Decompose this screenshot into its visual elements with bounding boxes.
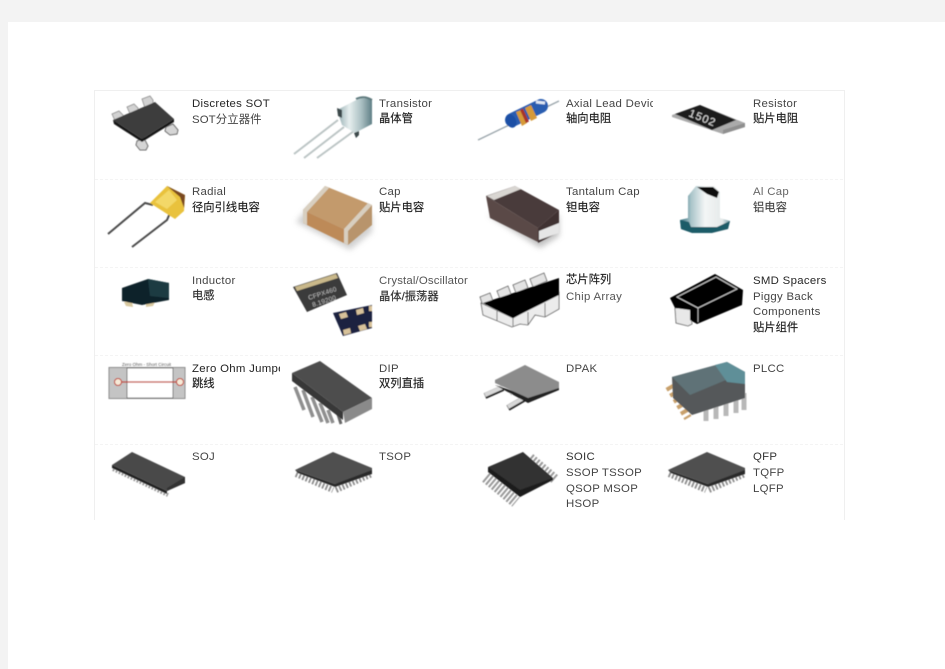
label: SMD Spacers: Components (753, 306, 821, 318)
label: Resistor: 贴片电阻 (753, 111, 798, 125)
label: Inductor: 电感 (192, 288, 215, 302)
cell: QFP (668, 451, 785, 495)
label: Resistor (753, 98, 798, 125)
row 4 (109, 361, 785, 424)
row 1 (112, 96, 798, 158)
icon: DPAK package (485, 365, 559, 408)
label: Axial Lead Device (566, 99, 653, 124)
cell: Transistor (294, 97, 432, 158)
row 2 (108, 186, 789, 250)
label: QFP (753, 451, 785, 495)
label: Tantalum Cap: Tantalum Cap (566, 186, 640, 198)
icon: crystal oscillator: 8.19200 (311, 294, 337, 309)
label: SOIC (566, 451, 642, 510)
cell: Inductor (122, 275, 236, 307)
label: DPAK: DPAK (566, 363, 597, 375)
icon: SMD spacer (670, 274, 743, 326)
label: QFP: QFP (753, 451, 777, 463)
label: SOIC: SOIC (566, 451, 595, 463)
icon: DIP package (292, 361, 372, 424)
component table frame (94, 90, 844, 520)
label: SOIC: HSOP (566, 498, 599, 510)
label: Zero Ohm Jumper: Zero Ohm Jumper (192, 363, 289, 375)
label: Cap (379, 186, 424, 214)
icon: chip resistor: 1502 (687, 108, 718, 129)
label: SMD Spacers: 贴片组件 (753, 320, 798, 334)
cell: Zero Ohm Jumper (109, 362, 289, 398)
icon: SOIC package (486, 452, 556, 502)
icon: axial resistor (478, 101, 559, 140)
cell: Resistor (672, 98, 798, 134)
cell: Chip Array (480, 272, 622, 327)
label: Inductor (192, 275, 236, 302)
cell: TSOP (295, 451, 411, 490)
icon: ceramic chip capacitor (296, 186, 372, 250)
label: Crystal/Oscillator (379, 275, 468, 303)
label: QFP: LQFP (753, 483, 784, 495)
row 5 (112, 451, 785, 510)
label: Radial: 径向引线电容 (192, 200, 260, 214)
icon: zero ohm jumper (109, 362, 185, 398)
label: TSOP: TSOP (379, 451, 411, 463)
label: Chip Array (566, 272, 622, 303)
label: Al Cap: Al Cap (753, 186, 789, 198)
row 3 (122, 272, 827, 336)
cell: Al Cap (680, 186, 789, 233)
cell: Cap (296, 186, 424, 250)
label: QFP: TQFP (753, 467, 785, 479)
label: Zero Ohm Jumper: 跳线 (192, 376, 215, 390)
label: DIP (379, 363, 424, 390)
label: Inductor: Inductor (192, 275, 236, 287)
icon: chip array (480, 273, 559, 327)
cell: Crystal/Oscillator (293, 273, 468, 336)
cell: Radial (108, 186, 260, 247)
icon: SOT package (112, 96, 178, 150)
icon: crystal oscillator (293, 273, 372, 336)
cell: Axial Lead Device (478, 98, 662, 140)
label: DIP: 双列直插 (379, 376, 424, 390)
label: SMD Spacers: Piggy Back (753, 291, 813, 303)
label: Radial (192, 186, 260, 214)
icon: inductor (122, 279, 169, 307)
icon: aluminium capacitor (680, 186, 730, 233)
label: SOJ: SOJ (192, 451, 215, 463)
cell: DPAK (485, 363, 597, 408)
label: Chip Array: 芯片阵列 (566, 272, 611, 286)
icon: QFP package (668, 452, 745, 490)
label: DIP: DIP (379, 363, 399, 375)
label: PLCC: PLCC (753, 363, 785, 375)
cell: PLCC (669, 362, 785, 421)
label: Al Cap (753, 186, 789, 214)
label: Discretes SOT (192, 98, 270, 126)
label: SOIC: SSOP TSSOP (566, 467, 642, 479)
cell: Discretes SOT (112, 96, 270, 150)
label: Tantalum Cap (566, 186, 640, 214)
icon: radial capacitor (108, 186, 185, 247)
label: Resistor: Resistor (753, 98, 797, 110)
cell: SOIC (486, 451, 642, 510)
label: Discretes SOT: Discretes SOT (192, 98, 270, 110)
label: Crystal/Oscillator: 晶体/振荡器 (379, 289, 439, 303)
label: Axial Lead Device: 轴向电阻 (566, 111, 611, 125)
label: Transistor (379, 98, 432, 125)
label: SMD Spacers (753, 275, 827, 334)
label: Axial Lead Device: Axial Lead Device (566, 98, 662, 110)
icon: TSOP package (295, 452, 372, 490)
cell: SOJ (112, 451, 215, 495)
label: Cap: 贴片电容 (379, 200, 424, 214)
label: Transistor: Transistor (379, 98, 432, 110)
icon: SOJ package (112, 452, 185, 495)
label: Zero Ohm Jumper (192, 364, 280, 388)
label: Transistor: 晶体管 (379, 111, 413, 125)
icon: crystal oscillator: CFPX460 (307, 286, 338, 302)
label: Cap: Cap (379, 186, 401, 198)
cell: Tantalum Cap (486, 186, 640, 248)
cell: SMD Spacers (670, 274, 827, 334)
label: Al Cap: 铝电容 (753, 200, 787, 214)
label: Tantalum Cap: 钽电容 (566, 200, 600, 214)
icon: tantalum capacitor (486, 186, 559, 248)
icon: PLCC package (669, 362, 745, 421)
label: SOIC: QSOP MSOP (566, 483, 638, 495)
label: Discretes SOT: SOT分立器件 (192, 112, 262, 126)
icon: transistor (294, 97, 372, 158)
icon: zero ohm jumper: Zero Ohm - Short Circuit (122, 362, 172, 367)
label: Crystal/Oscillator: Crystal/Oscillator (379, 275, 468, 287)
label: Chip Array: Chip Array (566, 291, 622, 303)
cell: DIP (292, 361, 424, 424)
label: Radial: Radial (192, 186, 226, 198)
label: SMD Spacers: SMD Spacers (753, 275, 827, 287)
